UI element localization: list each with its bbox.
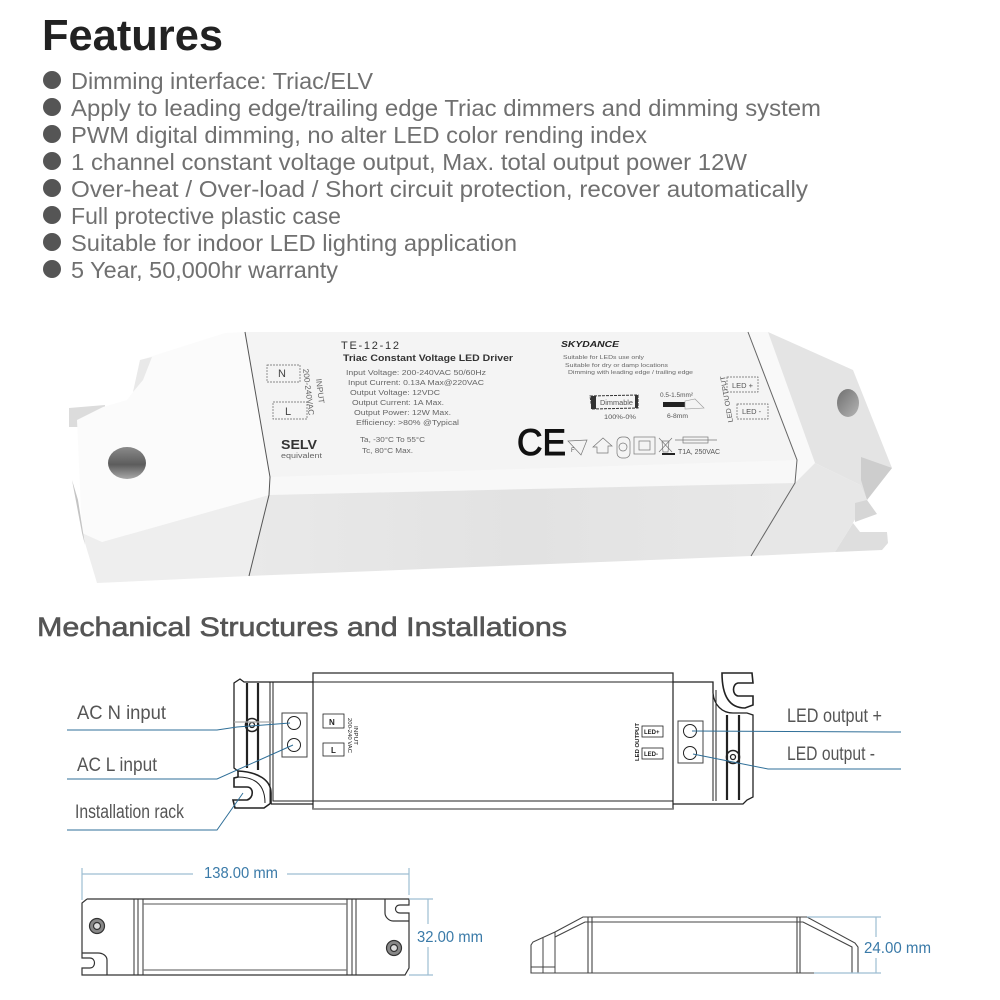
product label text: TE-12-12 — [341, 340, 399, 352]
icon: wire spec: 0.5-1.5mm² — [660, 393, 693, 399]
product label text: Dimming with leading edge / trailing edge — [568, 370, 693, 376]
product label text: L — [285, 406, 291, 418]
feature list: Suitable for indoor LED lighting application — [71, 230, 517, 256]
icon: wire spec — [660, 393, 704, 420]
dimension values — [204, 865, 483, 946]
callout labels: LED output + — [787, 706, 882, 727]
regulatory icons — [568, 437, 717, 458]
icon: dimmable badge — [590, 395, 638, 421]
feature list: Apply to leading edge/trailing edge Triac dimmers and dimming system — [71, 95, 821, 121]
product label text: Efficiency: >80% @Typical — [356, 418, 459, 427]
output terminal — [678, 721, 703, 763]
leader lines — [67, 723, 901, 830]
feature list: Dimming interface: Triac/ELV — [71, 68, 374, 94]
mechanical diagram — [67, 673, 901, 830]
callout labels: Installation rack — [75, 802, 184, 823]
product label text: INPUT — [314, 378, 326, 404]
product label text: F — [571, 448, 575, 454]
CE mark: CE — [517, 422, 566, 463]
output markings: LED OUTPUT — [635, 723, 641, 761]
title: Features — [42, 11, 223, 60]
output terminal labels: LED - — [742, 407, 762, 416]
callout labels: LED output - — [787, 744, 875, 765]
product label text: N — [278, 368, 286, 380]
input terminal — [282, 713, 307, 757]
section heading: Mechanical Structures and Installations — [37, 612, 567, 642]
input markings — [323, 714, 358, 756]
output markings: LED- — [644, 752, 658, 758]
icon: wire spec: 6-8mm — [667, 414, 688, 420]
product label text: Ta, -30°C To 55°C — [360, 435, 426, 444]
product label text: T1A, 250VAC — [678, 449, 720, 456]
product label text: 200-240VAC — [301, 368, 316, 416]
feature list: Full protective plastic case — [71, 203, 341, 229]
output terminal labels — [720, 375, 768, 423]
feature list: 5 Year, 50,000hr warranty — [71, 257, 338, 283]
dimension values: 32.00 mm — [417, 929, 483, 946]
output markings — [635, 723, 663, 761]
dimension lines — [82, 868, 433, 975]
product label text: Suitable for dry or damp locations — [565, 363, 668, 369]
callout labels: AC L input — [77, 755, 158, 776]
input markings: N — [329, 718, 335, 727]
output terminal labels: LED OUTPUT — [720, 375, 735, 423]
output terminal labels: LED + — [732, 381, 754, 390]
product label text: SELV — [281, 437, 317, 452]
icon: dimmable badge: Dimmable — [600, 400, 633, 407]
product label text: equivalent — [281, 453, 322, 460]
icon: dimmable badge: 100%-0% — [604, 414, 636, 421]
dimension lines — [807, 917, 881, 973]
feature list: 1 channel constant voltage output, Max. total output power 12W — [71, 149, 747, 175]
right end cap — [673, 673, 753, 804]
feature list: Over-heat / Over-load / Short circuit protection, recover automatically — [71, 176, 809, 202]
input markings: 200-240 VAC — [346, 718, 352, 753]
callout labels — [75, 703, 882, 823]
product label text: SKYDANCE — [561, 340, 620, 349]
left end cap — [233, 679, 313, 808]
product label text — [267, 340, 768, 463]
input markings: INPUT — [352, 726, 358, 745]
product label text: Tc, 80°C Max. — [362, 446, 413, 455]
dimension value: 24.00 mm — [864, 940, 931, 957]
callout labels: AC N input — [77, 703, 167, 724]
product photo: LED driver — [69, 332, 892, 583]
product label text: Suitable for LEDs use only — [563, 355, 644, 361]
product label text: Triac Constant Voltage LED Driver — [343, 353, 513, 364]
product label text: Output Current: 1A Max. — [352, 398, 444, 407]
feature list: PWM digital dimming, no alter LED color rending index — [71, 122, 648, 148]
feature list — [43, 68, 821, 283]
product label text: Output Power: 12W Max. — [354, 408, 451, 417]
output markings: LED+ — [644, 730, 660, 736]
dimension values: 138.00 mm — [204, 865, 278, 882]
product label text: Input Current: 0.13A Max@220VAC — [348, 378, 485, 387]
product label text: Output Voltage: 12VDC — [350, 388, 441, 397]
product label text: Input Voltage: 200-240VAC 50/60Hz — [346, 368, 486, 377]
top view with dimensions — [82, 865, 483, 975]
side view with dimensions — [531, 917, 931, 973]
input markings: L — [331, 746, 336, 755]
